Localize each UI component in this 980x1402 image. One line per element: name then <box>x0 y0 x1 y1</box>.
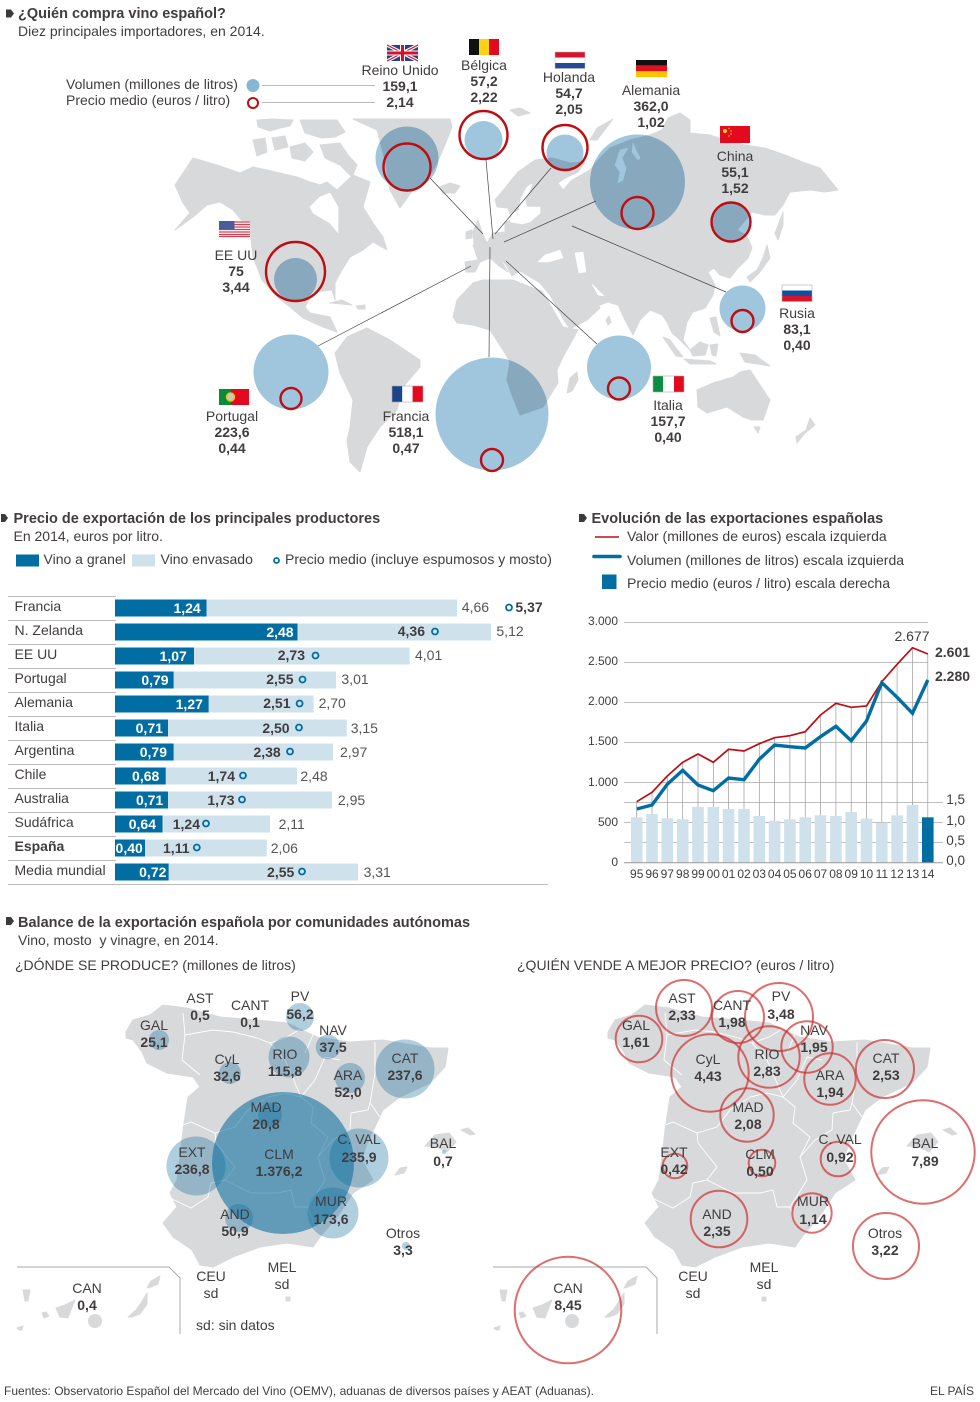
labels: production: 173,6 <box>313 1211 349 1227</box>
subheading: quién vende a mejor precio: ¿QUIÉN VENDE A MEJOR PRECIO? (euros / litro) <box>517 957 834 973</box>
bubbles: francia <box>436 358 548 471</box>
label: reino unido: 159,1 <box>382 78 418 94</box>
labels: production: 0,7 <box>433 1153 453 1169</box>
labels: price: 1,95 <box>800 1039 828 1055</box>
labels: production: CyL <box>215 1051 240 1067</box>
labels: production: sd <box>275 1276 289 1292</box>
label: portugal: 0,44 <box>218 440 246 456</box>
label: italia: 157,7 <box>650 413 686 429</box>
labels: price: Otros <box>868 1225 902 1241</box>
row: Alemania: Alemania <box>14 694 73 710</box>
row: España: España <box>14 838 65 854</box>
flag: bélgica <box>469 39 499 55</box>
legend: bar chart: Vino a granel <box>44 551 126 567</box>
row: Italia: Italia <box>14 718 44 734</box>
labels: production: MAD <box>250 1099 282 1115</box>
left axis labels: 1.500 <box>588 734 618 748</box>
year labels: 95 <box>630 867 644 881</box>
labels: production: 20,8 <box>252 1116 280 1132</box>
label: ee uu <box>215 247 257 295</box>
label: rusia: Rusia <box>779 305 815 321</box>
legend: bar chart: Precio medio (incluye espumosos y mosto) <box>285 551 552 567</box>
year labels: 98 <box>676 867 690 881</box>
label: china: 55,1 <box>721 164 749 180</box>
label: portugal: Portugal <box>206 408 258 424</box>
bubbles: italia <box>587 336 651 400</box>
right axis labels: 0,0 <box>946 853 965 868</box>
labels: price: CyL <box>696 1051 721 1067</box>
labels: price: 4,43 <box>694 1068 722 1084</box>
connector lines <box>318 160 726 357</box>
row: Sudáfrica: 2,11 <box>279 816 305 832</box>
labels: production: 56,2 <box>286 1006 314 1022</box>
labels: price: CLM <box>745 1146 775 1162</box>
row: Portugal: Portugal <box>14 670 67 686</box>
year labels: 14 <box>921 867 935 881</box>
labels: price: 2,35 <box>703 1223 731 1239</box>
label: italia <box>650 397 686 445</box>
right axis labels <box>946 792 965 868</box>
legend: line chart <box>594 528 904 591</box>
flag: ee uu <box>219 221 250 237</box>
labels: production: 237,6 <box>387 1067 423 1083</box>
row: España: 1,11 <box>163 840 190 856</box>
labels: production: MEL <box>268 1259 297 1275</box>
row: Alemania <box>8 692 346 712</box>
flag: reino unido <box>387 45 418 61</box>
row: N. Zelanda: N. Zelanda <box>14 622 83 638</box>
labels: production: 235,9 <box>341 1149 377 1165</box>
label: china: China <box>717 148 753 164</box>
labels: price: 2,53 <box>872 1067 900 1083</box>
labels: price: AST <box>668 990 696 1006</box>
labels: price: 3,22 <box>871 1242 899 1258</box>
row: Sudáfrica: 1,24 <box>173 816 200 832</box>
labels: price: MUR <box>797 1193 829 1209</box>
row: Sudáfrica: Sudáfrica <box>14 814 74 830</box>
flag: francia <box>392 386 423 402</box>
labels: production: 32,6 <box>213 1068 241 1084</box>
label: francia <box>383 408 430 456</box>
labels: price: 1,61 <box>622 1034 650 1050</box>
year labels: 11 <box>876 867 888 881</box>
labels: production: 115,8 <box>268 1063 302 1079</box>
row: Francia: 4,66 <box>462 599 489 615</box>
year labels: 97 <box>661 867 674 881</box>
row: N. Zelanda: 5,12 <box>496 623 524 639</box>
row: Italia: 3,15 <box>351 720 378 736</box>
year labels: 96 <box>645 867 659 881</box>
row: Australia: 0,71 <box>136 792 163 808</box>
labels: price: PV <box>772 988 791 1004</box>
label: francia: 0,47 <box>392 440 420 456</box>
row: España <box>8 836 298 856</box>
labels: price: C. VAL <box>818 1131 862 1147</box>
bubbles: rusia <box>720 286 766 332</box>
left axis labels: 2.500 <box>588 654 618 668</box>
left axis labels: 3.000 <box>588 614 618 628</box>
flag: portugal <box>219 389 249 405</box>
right axis labels: 1,5 <box>946 792 965 807</box>
label: italia: Italia <box>653 397 683 413</box>
row: Media mundial <box>8 860 391 880</box>
left axis labels: 1.000 <box>588 775 618 789</box>
labels: price <box>553 988 939 1313</box>
label: bélgica: 57,2 <box>470 73 498 89</box>
labels: production: CLM <box>264 1146 294 1162</box>
label: ee uu: 75 <box>228 263 244 279</box>
row: Argentina: Argentina <box>14 742 75 758</box>
labels: production: 37,5 <box>319 1039 347 1055</box>
label: rusia: 0,40 <box>783 337 811 353</box>
labels: production: 236,8 <box>174 1161 210 1177</box>
labels: production: 50,9 <box>221 1223 249 1239</box>
label: holanda: Holanda <box>543 69 595 85</box>
labels: price: MAD <box>732 1099 764 1115</box>
year labels: 00 <box>707 867 720 881</box>
labels: production: BAL <box>430 1135 456 1151</box>
row: Australia: 2,95 <box>338 792 365 808</box>
row: Francia <box>8 596 543 616</box>
labels: price: 1,94 <box>816 1084 844 1100</box>
row: Sudáfrica: 0,64 <box>129 816 156 832</box>
left axis labels <box>588 614 618 869</box>
row: Argentina: 2,38 <box>253 744 281 760</box>
year labels: 04 <box>768 867 782 881</box>
row: Alemania: 2,70 <box>319 695 346 711</box>
bubbles: portugal <box>254 334 328 410</box>
row: Portugal: 3,01 <box>341 671 369 687</box>
label: china <box>717 148 753 196</box>
year labels: 08 <box>829 867 843 881</box>
labels: price: 3,48 <box>767 1006 795 1022</box>
row: Media mundial: 3,31 <box>364 864 391 880</box>
year labels: 01 <box>722 867 736 881</box>
year labels: 99 <box>691 867 705 881</box>
legend: volumen y precio <box>66 76 375 108</box>
label: rusia <box>779 305 815 353</box>
labels: price: RIO <box>755 1046 780 1062</box>
labels: production: AND <box>220 1206 250 1222</box>
labels: production: GAL <box>140 1017 168 1033</box>
legend: line chart: Volumen (millones de litros) escala izquierda <box>627 552 904 568</box>
label: alemania: Alemania <box>622 82 680 98</box>
labels: production: sd <box>204 1285 218 1301</box>
label: francia: Francia <box>383 408 430 424</box>
left axis labels: 500 <box>598 815 618 829</box>
flag: italia <box>653 376 684 392</box>
row: Portugal: 0,79 <box>141 672 169 688</box>
label: holanda: 2,05 <box>555 101 583 117</box>
row: Chile: 0,68 <box>132 768 160 784</box>
labels: price: 7,89 <box>911 1153 939 1169</box>
label: bélgica <box>461 57 507 105</box>
flag: rusia <box>782 285 812 302</box>
labels: production: ARA <box>334 1067 363 1083</box>
row: Italia <box>8 716 378 736</box>
labels: price: EXT <box>660 1144 688 1160</box>
end labels <box>894 628 970 684</box>
row: Media mundial: Media mundial <box>14 862 106 878</box>
bubbles: alemania <box>590 134 685 230</box>
labels: production: CAT <box>392 1050 419 1066</box>
year labels: 10 <box>860 867 873 881</box>
year labels: 12 <box>890 867 904 881</box>
bubbles: production <box>149 1003 446 1250</box>
row: EE UU: 4,01 <box>415 647 442 663</box>
labels: price: sd <box>757 1276 771 1292</box>
labels: price: 1,14 <box>799 1211 827 1227</box>
heading: balance de la exportación: Balance de la exportación española por comunidades autónomas <box>18 915 470 931</box>
row: Australia: Australia <box>14 790 69 806</box>
left axis labels: 0 <box>611 855 618 869</box>
labels: production: MUR <box>315 1193 347 1209</box>
row: Argentina: 0,79 <box>140 744 167 760</box>
label: ee uu: EE UU <box>215 247 257 263</box>
price bars <box>631 805 934 863</box>
labels: production: RIO <box>273 1046 298 1062</box>
year labels: 13 <box>906 867 919 881</box>
legend: volumen y precio: Precio medio (euros / litro) <box>66 92 230 108</box>
year labels: 07 <box>814 867 827 881</box>
labels: price: CAN <box>553 1280 583 1296</box>
line chart: evolución de las exportaciones <box>588 614 970 881</box>
labels: price: MEL <box>750 1259 779 1275</box>
right axis labels: 1,0 <box>946 813 965 828</box>
labels: price: NAV <box>800 1022 829 1038</box>
row: Argentina <box>8 740 367 760</box>
heading: precio de exportación <box>1 511 380 544</box>
label: francia: 518,1 <box>388 424 424 440</box>
bubbles: bélgica <box>460 111 508 159</box>
row: España: 0,40 <box>116 840 143 856</box>
labels: price: CEU <box>678 1268 708 1284</box>
row: Francia: Francia <box>14 598 61 614</box>
end labels: 2.677 <box>894 628 930 644</box>
legend: bar chart <box>16 551 552 567</box>
label: alemania: 362,0 <box>633 98 669 114</box>
legend: bar chart: Vino envasado <box>160 551 253 567</box>
labels: production: CANT <box>231 997 269 1013</box>
bar chart: precio de exportación <box>8 596 548 884</box>
value line <box>637 648 928 802</box>
row: Alemania: 1,27 <box>176 696 203 712</box>
spain map: production <box>17 988 475 1334</box>
heading: balance de la exportación: Vino, mosto y vinagre, en 2014. <box>18 932 219 948</box>
legend: line chart: Precio medio (euros / litro) escala derecha <box>627 575 890 591</box>
row: Chile <box>8 764 328 784</box>
flag: alemania <box>636 60 667 77</box>
label: portugal: 223,6 <box>214 424 250 440</box>
heading: evolución de las exportaciones: Evolución de las exportaciones españolas <box>592 511 883 527</box>
labels: production: AST <box>186 990 214 1006</box>
labels: production: 52,0 <box>334 1084 362 1100</box>
labels: price: ARA <box>816 1067 845 1083</box>
row: Chile: 2,48 <box>300 768 328 784</box>
row: EE UU <box>8 644 442 664</box>
label: holanda <box>543 69 595 117</box>
row: España: 2,06 <box>271 840 298 856</box>
bubbles: holanda <box>542 125 588 172</box>
row: Francia: 1,24 <box>173 600 201 616</box>
legend: volumen y precio: Volumen (millones de litros) <box>66 76 238 92</box>
flag: holanda <box>555 52 585 68</box>
label: ee uu: 3,44 <box>222 279 250 295</box>
labels: production: 0,5 <box>190 1007 210 1023</box>
world map <box>175 108 838 472</box>
labels: price: 0,92 <box>826 1149 854 1165</box>
labels: price: 8,45 <box>554 1297 582 1313</box>
row: Australia <box>8 788 365 808</box>
labels: production: CEU <box>196 1268 226 1284</box>
row: Italia: 0,71 <box>136 720 163 736</box>
left axis labels: 2.000 <box>588 694 618 708</box>
labels: production: 0,1 <box>240 1014 260 1030</box>
row: Media mundial: 0,72 <box>139 864 167 880</box>
subheading: dónde se produce: ¿DÓNDE SE PRODUCE? (millones de litros) <box>15 957 296 973</box>
year labels: 02 <box>737 867 751 881</box>
row: Argentina: 2,97 <box>340 744 367 760</box>
heading: quién compra vino español: Diez principales importadores, en 2014. <box>18 23 265 39</box>
row: Portugal: 2,55 <box>266 671 294 687</box>
heading: precio de exportación: Precio de exportación de los principales productores <box>14 511 380 527</box>
labels: price: 2,33 <box>668 1007 696 1023</box>
labels: production: NAV <box>319 1022 348 1038</box>
year labels <box>630 867 935 881</box>
labels: production: C. VAL <box>337 1131 381 1147</box>
labels: price: CAT <box>873 1050 900 1066</box>
label: portugal <box>206 408 258 456</box>
bubbles: ee uu <box>266 242 325 301</box>
year labels: 03 <box>753 867 766 881</box>
labels: price: CANT <box>713 997 751 1013</box>
label: alemania <box>622 82 680 130</box>
label: alemania: 1,02 <box>637 114 665 130</box>
labels: price: 1,98 <box>718 1014 746 1030</box>
labels: price: 0,42 <box>660 1161 688 1177</box>
heading: quién compra vino español: ¿Quién compra vino español? <box>18 6 226 22</box>
label: bélgica: Bélgica <box>461 57 507 73</box>
labels: production: 0,4 <box>77 1297 97 1313</box>
row: Sudáfrica <box>8 812 305 832</box>
label: bélgica: 2,22 <box>470 89 498 105</box>
row: N. Zelanda <box>8 620 524 640</box>
end labels: 2.601 <box>935 644 970 660</box>
row: Italia: 2,50 <box>262 720 290 736</box>
label: reino unido: Reino Unido <box>361 62 439 78</box>
bubbles: price <box>515 980 975 1363</box>
row: EE UU: EE UU <box>14 646 57 662</box>
labels: price: AND <box>702 1206 732 1222</box>
labels: price: 2,08 <box>734 1116 762 1132</box>
labels: price: BAL <box>912 1135 938 1151</box>
labels: production <box>72 988 456 1313</box>
labels: production: Otros <box>386 1225 420 1241</box>
row: N. Zelanda: 4,36 <box>398 623 425 639</box>
bubbles: china <box>712 202 750 242</box>
labels: production: EXT <box>178 1144 206 1160</box>
flag: china <box>720 126 750 143</box>
labels: production: PV <box>291 988 310 1004</box>
labels: production: CAN <box>72 1280 102 1296</box>
heading: balance de la exportación <box>6 915 470 948</box>
footer: credit: EL PAÍS <box>930 1383 974 1398</box>
year gridlines <box>637 648 928 863</box>
heading: quién compra vino español <box>6 6 265 39</box>
row: Australia: 1,73 <box>207 792 235 808</box>
year labels: 05 <box>783 867 797 881</box>
legend: line chart: Valor (millones de euros) escala izquierda <box>627 528 887 544</box>
heading: precio de exportación: En 2014, euros por litro. <box>14 528 163 544</box>
spain map: price <box>493 980 975 1363</box>
row: Chile: Chile <box>14 766 47 782</box>
end labels: 2.280 <box>935 668 970 684</box>
row: EE UU: 1,07 <box>160 648 187 664</box>
row: EE UU: 2,73 <box>278 647 305 663</box>
label: reino unido: 2,14 <box>386 94 414 110</box>
label: italia: 0,40 <box>654 429 682 445</box>
label: reino unido <box>361 62 439 110</box>
right axis labels: 0,5 <box>946 833 965 848</box>
row: Francia: 5,37 <box>515 599 543 615</box>
labels: production: 3,3 <box>393 1242 413 1258</box>
row: N. Zelanda: 2,48 <box>266 624 294 640</box>
labels: price: GAL <box>622 1017 650 1033</box>
label: holanda: 54,7 <box>555 85 583 101</box>
note: sin datos: sd: sin datos <box>196 1317 275 1333</box>
labels: production: 1.376,2 <box>256 1163 303 1179</box>
bubbles: reino unido <box>376 126 438 190</box>
labels: price: 2,83 <box>753 1063 781 1079</box>
row: Alemania: 2,51 <box>263 695 291 711</box>
row: Chile: 1,74 <box>208 768 235 784</box>
volume line <box>637 680 928 809</box>
labels: price: sd <box>686 1285 700 1301</box>
labels: production: 25,1 <box>140 1034 168 1050</box>
label: rusia: 83,1 <box>783 321 811 337</box>
row: Portugal <box>8 668 369 688</box>
row: Media mundial: 2,55 <box>267 864 295 880</box>
labels: price: 0,50 <box>746 1163 774 1179</box>
label: china: 1,52 <box>721 180 749 196</box>
footer: sources: Fuentes: Observatorio Español del Mercado del Vino (OEMV), aduanas de diversos países y AEAT (Aduanas). <box>4 1384 594 1398</box>
year labels: 06 <box>799 867 812 881</box>
year labels: 09 <box>845 867 858 881</box>
